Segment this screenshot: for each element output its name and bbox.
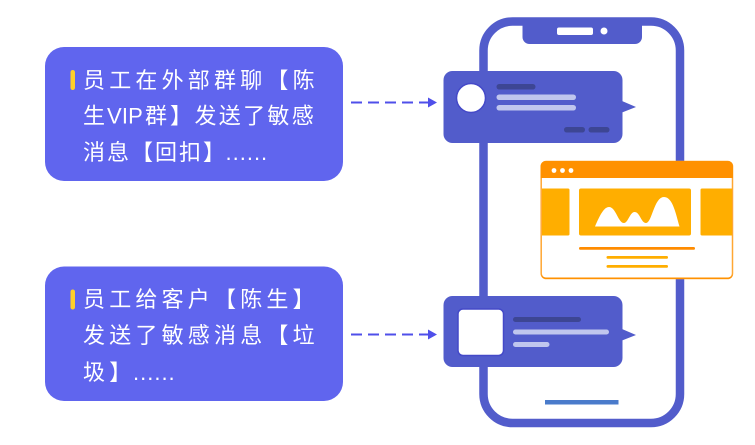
- text block: external group chat: 发送了敏感: [194, 104, 316, 128]
- right panel: [700, 188, 732, 236]
- browser window: [541, 161, 733, 279]
- text block: customer message: 发送了敏感消息【垃: [83, 323, 319, 348]
- message lines: [496, 84, 610, 132]
- left panel: [542, 188, 570, 236]
- text block: external group chat: 员工在外部群聊【陈: [83, 68, 319, 93]
- window dots: [552, 168, 573, 173]
- phone camera: [600, 28, 608, 34]
- text block: external group chat: 群: [145, 104, 167, 128]
- icon: yellow marker: [70, 290, 75, 310]
- window text lines: [579, 247, 695, 268]
- window bottom edge: [541, 274, 733, 279]
- chat bubble: top: [444, 71, 636, 143]
- chat bubble: bottom: [444, 296, 636, 367]
- phone home bar: [545, 400, 618, 404]
- text block: customer message: 员工给客户【陈生】: [83, 287, 319, 312]
- panel: external group chat message: [45, 47, 343, 181]
- text block: customer message: [83, 287, 319, 385]
- avatar circle: [456, 84, 486, 112]
- text block: customer message: ......: [133, 360, 176, 385]
- panel: customer message: [45, 266, 343, 401]
- phone: [484, 20, 680, 423]
- phone notch: [522, 20, 642, 44]
- text block: external group chat: [83, 68, 319, 165]
- text block: customer message: 圾】: [83, 360, 135, 385]
- text block: external group chat: VIP: [107, 104, 143, 128]
- message lines: [513, 317, 609, 347]
- arrow: bottom dashed: [351, 330, 437, 340]
- text block: external group chat: ......: [226, 140, 268, 165]
- phone speaker: [557, 28, 593, 35]
- image thumbnail: [458, 309, 504, 356]
- text block: external group chat: 生: [83, 104, 105, 128]
- text block: external group chat: 】: [170, 104, 192, 128]
- arrow: top dashed: [351, 98, 437, 108]
- chart panel: [579, 188, 691, 236]
- window header: [541, 161, 733, 178]
- icon: yellow marker: [70, 70, 75, 90]
- text block: external group chat: 消息【回扣】: [83, 140, 227, 165]
